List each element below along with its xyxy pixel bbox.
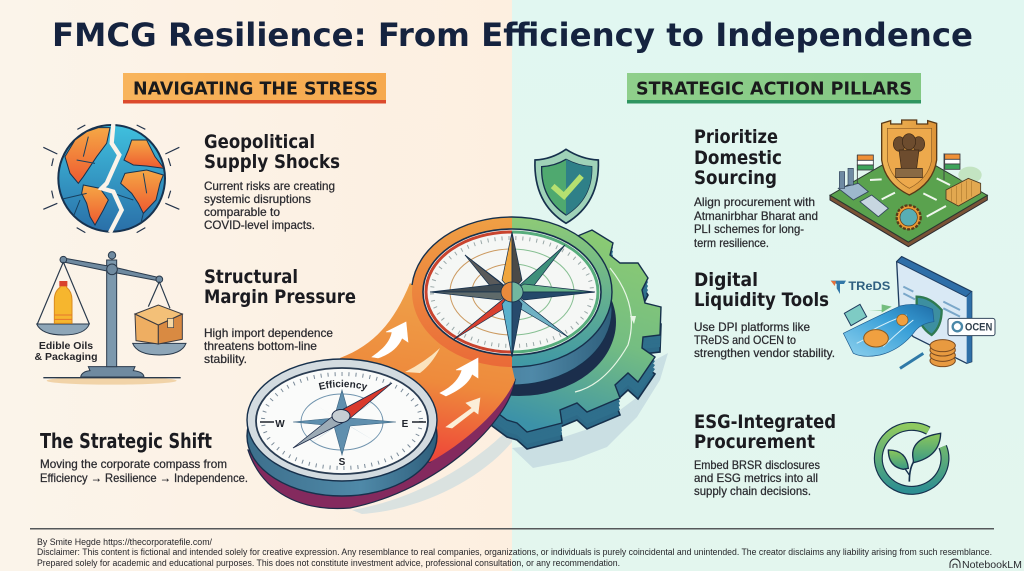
divider line: [30, 528, 994, 530]
text block: the strategic shift: Moving the corporate compass from: [40, 457, 227, 471]
footer: credit and disclaimer: [37, 537, 992, 569]
text block: ESG-integrated procurement: [694, 411, 836, 498]
text block: prioritize domestic sourcing: Sourcing: [694, 167, 777, 189]
central illustration: compass transformation: [246, 216, 668, 514]
text block: ESG-integrated procurement: supply chain decisions.: [694, 484, 811, 498]
coins: [864, 330, 888, 347]
text block: geopolitical supply shocks: Current risks are creating: [204, 179, 335, 193]
text block: digital liquidity tools: Liquidity Tools: [694, 289, 829, 311]
liquidity stream: [843, 304, 934, 356]
text block: geopolitical supply shocks: Supply Shocks: [204, 151, 340, 173]
big compass rose: [430, 232, 595, 357]
heading banner: strategic action pillars: [627, 73, 921, 104]
scale label: & Packaging: [34, 351, 98, 363]
scale label: [34, 340, 98, 363]
small compass: efficiency: Efficiency: [318, 380, 368, 392]
ribbon arrows: [372, 322, 480, 428]
ribbon: efficiency to resilience: [340, 283, 515, 462]
text block: digital liquidity tools: Use DPI platforms like: [694, 320, 810, 334]
container: [946, 178, 981, 206]
OCEN badge: [948, 318, 995, 336]
small compass: efficiency: E: [402, 419, 409, 430]
text block: prioritize domestic sourcing: Atmanirbhar Bharat and: [694, 209, 818, 223]
text block: prioritize domestic sourcing: [694, 126, 818, 250]
text block: geopolitical supply shocks: [204, 131, 340, 232]
text block: ESG-integrated procurement: Embed BRSR disclosures: [694, 458, 820, 472]
text block: structural margin pressure: Structural: [204, 266, 298, 288]
icon: digital liquidity platform: OCEN: [965, 322, 992, 334]
text block: prioritize domestic sourcing: term resilience.: [694, 236, 769, 250]
text block: the strategic shift: The Strategic Shift: [40, 429, 212, 453]
ground shadow: [352, 353, 668, 514]
text block: the strategic shift: Efficiency → Resilience → Independence.: [40, 471, 248, 485]
big compass ring: [412, 217, 612, 367]
browser window: [897, 257, 972, 363]
big compass hub: [501, 282, 523, 302]
text block: digital liquidity tools: strengthen vendor stability.: [694, 346, 835, 360]
text block: geopolitical supply shocks: systemic disruptions: [204, 192, 311, 206]
text block: structural margin pressure: High import dependence: [204, 326, 333, 340]
icon: fractured globe: [43, 124, 179, 233]
factory: [838, 183, 868, 200]
icon: digital liquidity platform: TReDS: [848, 279, 890, 293]
text block: geopolitical supply shocks: COVID-level impacts.: [204, 218, 315, 232]
icon: ESG leaf ring: [878, 426, 945, 490]
text block: digital liquidity tools: TReDS and OCEN to: [694, 333, 796, 347]
flags: [857, 153, 960, 183]
ribbon underside: [248, 380, 515, 509]
shield on screen: [917, 297, 942, 335]
icon: balance scale with oil and packaging: [37, 252, 186, 385]
small compass: efficiency: [246, 358, 438, 497]
envelope: [844, 304, 867, 326]
text block: the strategic shift: [40, 429, 248, 485]
TReDS logo: [831, 281, 846, 294]
text block: digital liquidity tools: [694, 269, 835, 360]
compass needle: [338, 383, 392, 420]
background: left warm panel: [0, 0, 512, 571]
text block: geopolitical supply shocks: Geopolitical: [204, 131, 315, 153]
text block: ESG-integrated procurement: and ESG metrics into all: [694, 471, 818, 485]
text block: structural margin pressure: Margin Pressure: [204, 286, 356, 308]
footer: credit and disclaimer: By Smite Hegde https://thecorporatefile.com/: [37, 537, 212, 548]
title: FMCG Resilience: From Efficiency to Independence: [52, 16, 973, 54]
footer: credit and disclaimer: Prepared solely for academic and educational purposes. This does not constitute investment advice, professional consultation, or any recommendation.: [37, 558, 620, 569]
text block: prioritize domestic sourcing: Prioritize: [694, 126, 778, 148]
text block: structural margin pressure: stability.: [204, 352, 247, 366]
text block: digital liquidity tools: Digital: [694, 269, 758, 291]
scale label: Edible Oils: [39, 340, 93, 352]
text block: prioritize domestic sourcing: Align procurement with: [694, 195, 815, 209]
flow arrows: [870, 178, 950, 217]
small compass: efficiency: S: [339, 457, 346, 468]
text block: structural margin pressure: threatens bottom-line: [204, 339, 317, 353]
big compass body side: [412, 235, 616, 396]
heading banner: strategic action pillars: STRATEGIC ACTION PILLARS: [636, 78, 912, 100]
compass letters: W: [275, 419, 285, 430]
text block: structural margin pressure: [204, 266, 356, 366]
text block: geopolitical supply shocks: comparable to: [204, 205, 280, 219]
heading banner: navigating the stress: NAVIGATING THE STRESS: [133, 78, 378, 100]
text block: ESG-integrated procurement: ESG-Integrated: [694, 411, 836, 433]
text block: ESG-integrated procurement: Procurement: [694, 431, 815, 453]
heading banner: navigating the stress: [123, 73, 386, 104]
national emblem: [893, 134, 925, 178]
text block: prioritize domestic sourcing: PLI schemes for long-: [694, 222, 804, 236]
NotebookLM watermark: NotebookLM: [962, 559, 1022, 571]
small gear globe: [897, 205, 921, 229]
emblem shield: [882, 120, 937, 195]
background: right cool panel: [512, 0, 1024, 571]
icon: green shield with check: [535, 149, 598, 223]
gear: [480, 230, 661, 449]
icon: domestic sourcing platform with emblem shield: [830, 120, 987, 247]
icon: digital liquidity platform: [831, 257, 995, 368]
text block: prioritize domestic sourcing: Domestic: [694, 147, 782, 169]
